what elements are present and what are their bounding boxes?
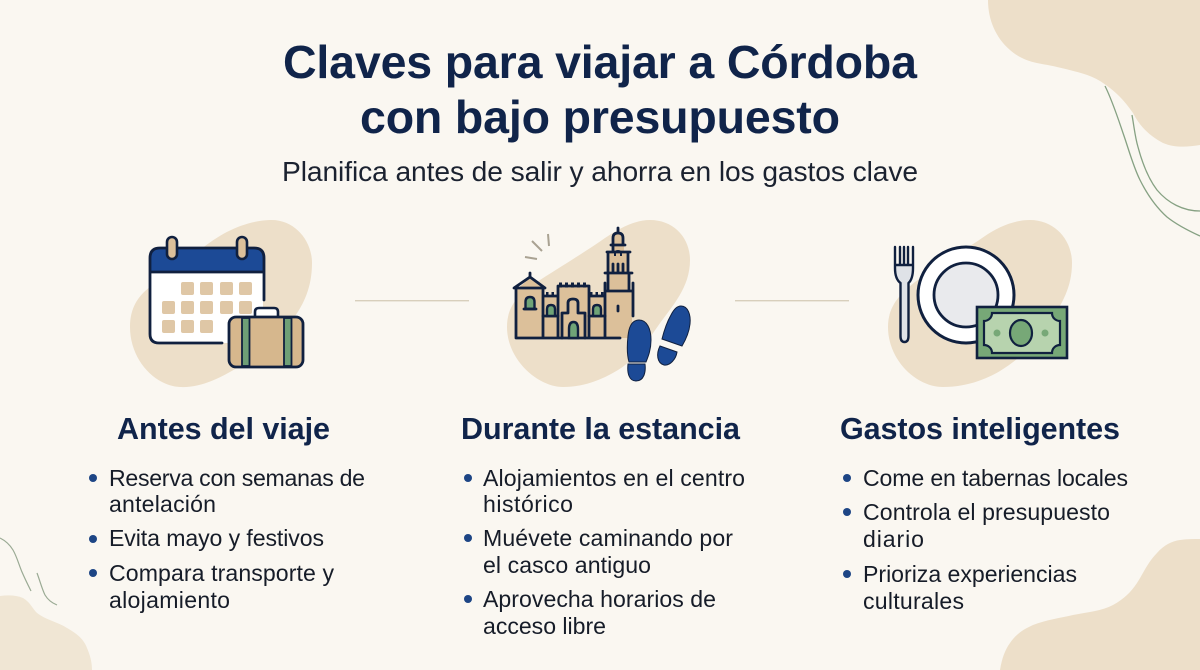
list: Come en tabernas locales [863, 465, 1128, 491]
list: Aprovecha horarios de [483, 586, 716, 612]
divider [735, 300, 849, 301]
title: Claves para viajar a Córdoba [283, 36, 918, 88]
list: Muévete caminando por [483, 525, 733, 551]
list: diario [863, 526, 924, 552]
list: culturales [863, 588, 964, 614]
list: Controla el presupuesto [863, 499, 1110, 525]
icon: cathedral and footprints [507, 220, 690, 387]
list [89, 465, 365, 613]
heading: Durante la estancia [461, 412, 741, 446]
decoration: bottom right blob [1000, 539, 1200, 670]
list: el casco antiguo [483, 552, 651, 578]
decoration: top right blob with lines [988, 0, 1200, 236]
list: Reserva con semanas de [109, 465, 365, 491]
column: gastos inteligentes [840, 412, 1128, 614]
column: antes del viaje [89, 412, 365, 613]
list: Compara transporte y [109, 560, 334, 586]
list [843, 465, 1128, 614]
subtitle: Planifica antes de salir y ahorra en los gastos clave [282, 155, 918, 187]
icon: plate, fork and banknote [888, 220, 1072, 387]
decoration: bottom left blob with lines [0, 538, 92, 670]
divider [355, 300, 469, 301]
list: Prioriza experiencias [863, 561, 1077, 587]
list: Evita mayo y festivos [109, 525, 324, 551]
title: con bajo presupuesto [360, 91, 840, 143]
list: acceso libre [483, 613, 606, 639]
column: durante la estancia [461, 412, 745, 639]
list: histórico [483, 491, 573, 517]
list: antelación [109, 491, 216, 517]
list [464, 465, 745, 639]
heading: Gastos inteligentes [840, 412, 1120, 446]
heading: Antes del viaje [117, 412, 330, 446]
list: alojamiento [109, 587, 230, 613]
icon: calendar and suitcase [130, 220, 312, 387]
list: Alojamientos en el centro [483, 465, 745, 491]
title [283, 36, 918, 143]
